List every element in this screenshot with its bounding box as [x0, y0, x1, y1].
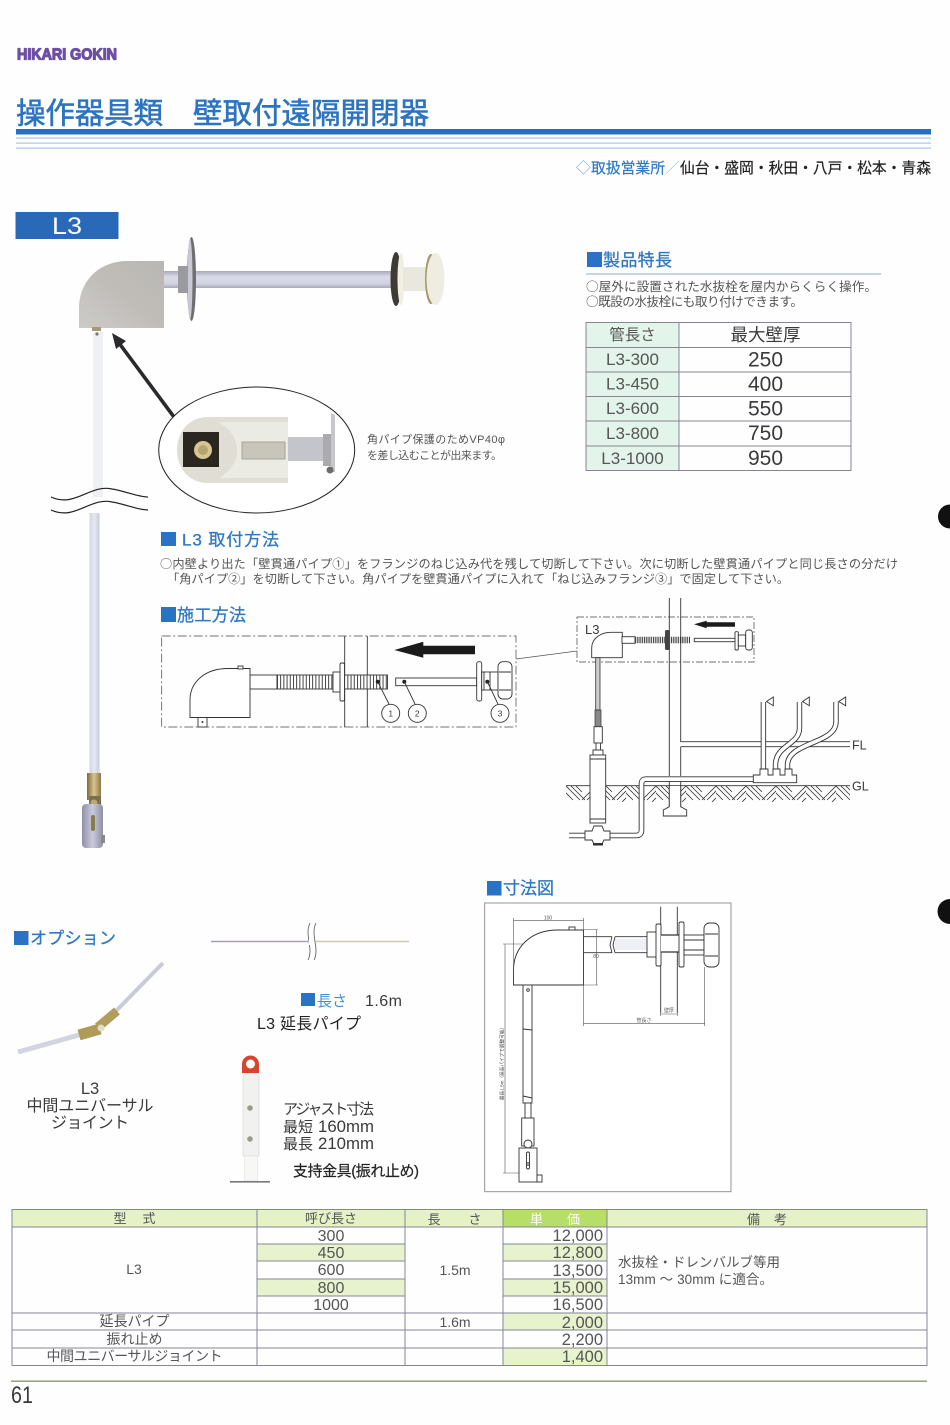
diagram: dimension drawing: 管長さ [636, 1017, 652, 1024]
table body: 600 [318, 1262, 344, 1279]
sales offices: 仙台・盛岡・秋田・八戸・松本・青森 [680, 160, 931, 177]
leader line between diagrams [516, 651, 577, 659]
footer rule [11, 1380, 927, 1382]
table: pipe length and max wall thickness: L3-300 [606, 350, 659, 369]
table prices: 15,000 [553, 1279, 603, 1297]
table body: 中間ユニバーサルジョイント [46, 1348, 222, 1364]
heading: product features: 製品特長 [603, 251, 672, 270]
table: price list [12, 1210, 927, 1366]
table remarks: 13mm ～ 30mm に適合。 [618, 1272, 773, 1287]
title: 操作器具類 [16, 98, 163, 130]
table body: 300 [318, 1228, 344, 1245]
table header: 単 価 [530, 1212, 580, 1227]
photo: support bracket [230, 1056, 270, 1183]
table header: 呼び長さ [305, 1211, 357, 1226]
label: extension pipe length: 長さ [317, 993, 347, 1010]
table: pipe length and max wall thickness: L3-600 [606, 399, 659, 418]
table body: 1.6m [439, 1314, 471, 1330]
diagram: dimension drawing: 100 [544, 916, 552, 922]
arrow to inset detail [112, 333, 174, 417]
sales offices [576, 160, 931, 177]
table: pipe length and max wall thickness: 最大壁厚 [730, 325, 800, 345]
label: extension pipe length [301, 993, 402, 1010]
inset note [367, 432, 505, 462]
diagram: site installation: L3 [585, 622, 599, 637]
table: pipe length and max wall thickness: L3-1000 [601, 449, 664, 468]
label: bracket adjust sizes: アジャスト寸法 [283, 1101, 374, 1118]
inset detail ellipse [159, 387, 355, 513]
table: pipe length and max wall thickness: L3-800 [606, 424, 659, 443]
table prices: 13,500 [553, 1262, 603, 1280]
installation text [160, 554, 898, 587]
label: bracket adjust sizes: 210mm [318, 1134, 374, 1153]
label: bracket adjust sizes [283, 1101, 374, 1153]
callouts: part numbers: 2 [415, 708, 420, 718]
table body: 450 [318, 1245, 344, 1262]
inset note: 角パイプ保護のためVP40φ [367, 432, 505, 446]
product photo: wall unit [79, 237, 444, 336]
heading: L3 installation: L3 取付方法 [182, 530, 279, 550]
table: pipe length and max wall thickness [586, 322, 851, 470]
table prices: 1,400 [562, 1348, 603, 1366]
icon: faucet flags [766, 697, 846, 706]
binder hole top [938, 504, 950, 528]
table body: 800 [318, 1280, 344, 1297]
title rules [16, 129, 931, 149]
table prices: 2,200 [562, 1331, 603, 1349]
page number: 61 [11, 1382, 33, 1409]
break wave lines [51, 488, 148, 513]
icon: mini direction arrow [694, 621, 735, 628]
feature text: ○既設の水抜栓にも取り付けできます。 [586, 291, 803, 310]
table header: 長 さ [428, 1212, 482, 1227]
table: pipe length and max wall thickness: 950 [748, 447, 783, 470]
heading: construction method: 施工方法 [177, 606, 246, 625]
binder hole bottom [938, 899, 950, 924]
product photo: long vertical pipe [82, 332, 105, 848]
table prices: 12,800 [553, 1244, 603, 1262]
icon: direction arrow [394, 642, 475, 658]
table header: 備 考 [747, 1212, 787, 1227]
heading: product features [586, 251, 881, 274]
table remarks: 水抜栓・ドレンバルブ等用 [618, 1254, 780, 1270]
diagram: dimension drawing: 80 [593, 954, 599, 960]
table body [46, 1228, 471, 1364]
label: support bracket: 支持金具(振れ止め) [293, 1163, 419, 1180]
dimension lines [503, 918, 705, 1173]
table prices [553, 1227, 603, 1366]
table body: 延長パイプ [100, 1313, 170, 1329]
label: universal joint [26, 1080, 154, 1132]
feature text: ○屋外に設置された水抜栓を屋内からくらく操作。 [586, 276, 877, 295]
label: universal joint: ジョイント [51, 1115, 129, 1132]
table header [114, 1211, 787, 1227]
installation text: 「角パイプ②」を切断して下さい。角パイプを壁貫通パイプに入れて「ねじ込みフランジ③」で固定して下さい。 [167, 569, 789, 587]
table: pipe length and max wall thickness: 750 [748, 422, 783, 445]
title: 壁取付遠隔開閉器 [193, 98, 429, 130]
table: pipe length and max wall thickness: 400 [748, 373, 783, 396]
sales offices: ／ [665, 160, 680, 177]
label: bracket adjust sizes: 最短 [283, 1119, 313, 1136]
label: bracket adjust sizes: 160mm [318, 1117, 374, 1136]
photo: universal joint [18, 963, 163, 1052]
riser pipes [763, 702, 836, 772]
photo: extension pipe [211, 923, 409, 960]
table header: 型 式 [114, 1211, 156, 1226]
diagram: site installation [566, 598, 869, 846]
table: pipe length and max wall thickness: 250 [748, 348, 783, 372]
label: extension pipe length: 1.6m [365, 993, 402, 1010]
model badge L3 [16, 212, 118, 240]
table prices: 12,000 [553, 1227, 603, 1245]
sales offices: 取扱営業所 [591, 160, 665, 177]
diagram: construction detail [162, 636, 516, 727]
label: universal joint: L3 [81, 1080, 99, 1098]
table body: L3 [126, 1261, 142, 1277]
diagram: site installation: FL [852, 738, 867, 752]
heading: dimension drawing: 寸法図 [503, 879, 554, 898]
heading: options: オプション [30, 929, 116, 948]
table body: 1000 [313, 1297, 349, 1314]
feature text [586, 276, 877, 310]
table: pipe length and max wall thickness: 550 [748, 398, 783, 420]
table: pipe length and max wall thickness: L3-450 [606, 374, 659, 394]
title [16, 98, 429, 130]
callouts: part numbers: 1 [388, 708, 393, 718]
model badge L3: L3 [52, 213, 82, 240]
diagram: dimension drawing: 壁厚 [664, 1007, 674, 1014]
table prices: 16,500 [553, 1296, 603, 1314]
label: universal joint: 中間ユニバーサル [26, 1097, 154, 1115]
installation text: ○内壁より出た「壁貫通パイプ①」をフランジのねじ込み代を残して切断して下さい。次に切断した壁貫通パイプと同じ長さの分だけ [160, 554, 898, 572]
table: pipe length and max wall thickness: 管長さ [609, 326, 656, 344]
table prices: 2,000 [562, 1314, 603, 1332]
callouts: part numbers: 3 [498, 708, 503, 718]
callouts: part numbers [376, 680, 509, 722]
diagram: dimension drawing [485, 903, 731, 1192]
sales offices: ◇ [576, 160, 591, 177]
table body: 振れ止め [106, 1331, 162, 1347]
table remarks [618, 1254, 780, 1287]
diagram: dimension drawing: 最長1.5m（延長パイプで調整可能） [498, 1025, 506, 1100]
diagram: site installation: GL [852, 780, 869, 794]
table body: 1.5m [439, 1262, 471, 1278]
inset note: を差し込むことが出来ます。 [367, 448, 502, 462]
label: bracket adjust sizes: 最長 [283, 1136, 313, 1153]
logo: HIKARI GOKIN: HIKARI GOKIN [17, 46, 117, 64]
label: extension pipe: L3 延長パイプ [257, 1015, 361, 1033]
